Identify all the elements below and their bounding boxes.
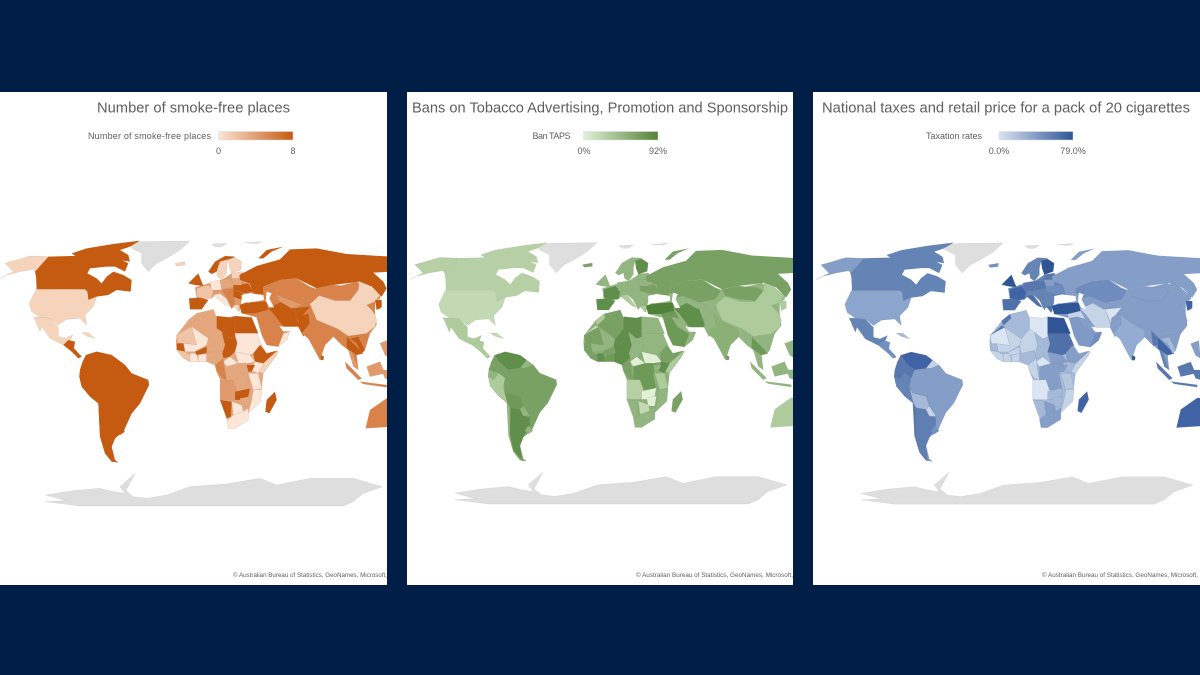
region: europe xyxy=(582,257,670,312)
legend: taxation rates xyxy=(926,131,1086,156)
region: south america xyxy=(79,352,149,463)
legend: smoke-free places: 8 xyxy=(290,146,296,156)
region: africa xyxy=(989,310,1090,428)
region: north america xyxy=(816,243,954,359)
legend: ban TAPS: Ban TAPS xyxy=(532,131,570,141)
map: tobacco advertising bans xyxy=(410,242,793,504)
heading: smoke-free places: Number of smoke-free places xyxy=(97,100,290,116)
legend: smoke-free places xyxy=(88,131,296,156)
attribution: © Australian Bureau of Statistics, GeoNames, Microsoft, xyxy=(233,571,387,579)
map: smoke-free places xyxy=(0,240,387,506)
region: north america xyxy=(0,241,140,358)
region: africa xyxy=(583,310,684,427)
legend: ban TAPS xyxy=(532,131,667,156)
panel: smoke-free places xyxy=(0,92,392,585)
legend: ban TAPS: 0% xyxy=(577,146,591,156)
legend: taxation rates: Taxation rates xyxy=(926,131,982,141)
legend: ban TAPS: 92% xyxy=(649,146,667,156)
map: cigarette taxation xyxy=(816,242,1200,504)
region: north america xyxy=(410,242,548,358)
region: south america xyxy=(894,352,963,461)
heading: tobacco advertising bans: Bans on Tobacco Advertising, Promotion and Sponsorship xyxy=(412,100,788,116)
panel: cigarette taxation xyxy=(813,92,1200,585)
region: asia and oceania xyxy=(1052,248,1200,428)
attribution: © Australian Bureau of Statistics, GeoNames, Microsoft, xyxy=(636,571,793,579)
region: south america xyxy=(488,352,557,461)
legend: taxation rates: 0.0% xyxy=(989,146,1009,156)
region: asia and oceania xyxy=(239,247,392,428)
heading: cigarette taxation: National taxes and retail price for a pack of 20 cigarettes xyxy=(822,100,1190,116)
region: europe xyxy=(988,258,1076,313)
region: asia and oceania xyxy=(646,248,796,427)
region: africa xyxy=(176,309,278,428)
region: europe xyxy=(175,256,263,312)
legend: taxation rates: 79.0% xyxy=(1060,146,1086,156)
panel: tobacco advertising bans xyxy=(407,92,796,585)
legend: smoke-free places: Number of smoke-free places xyxy=(88,131,212,141)
legend: smoke-free places: 0 xyxy=(216,146,221,156)
